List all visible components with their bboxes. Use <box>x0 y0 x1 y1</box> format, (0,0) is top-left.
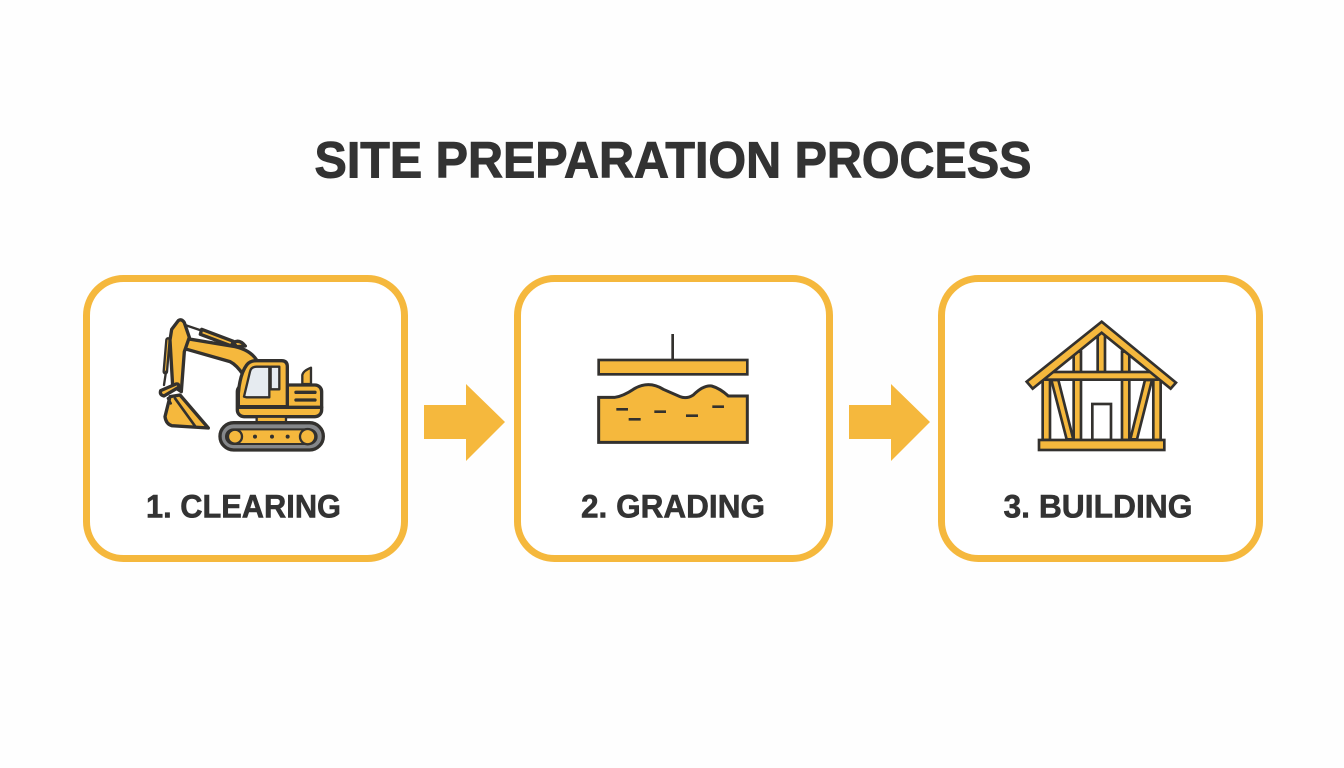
icon: grading blade and soil <box>599 334 747 442</box>
panel: step 2 grading <box>518 278 830 558</box>
panel border <box>86 278 404 558</box>
icon: excavator <box>160 320 323 450</box>
title: SITE PREPARATION PROCESS <box>314 132 1032 188</box>
arrow: clearing to grading <box>424 384 505 461</box>
label: grading: 2. GRADING <box>581 488 765 524</box>
label: clearing: 1. CLEARING <box>146 488 341 524</box>
panel border <box>518 278 830 558</box>
panel: step 1 clearing <box>86 278 404 558</box>
label: building: 3. BUILDING <box>1004 488 1192 524</box>
panel border <box>942 278 1260 558</box>
panel: step 3 building <box>942 278 1260 558</box>
arrow: grading to building <box>849 384 930 461</box>
icon: timber house frame <box>1027 322 1176 450</box>
